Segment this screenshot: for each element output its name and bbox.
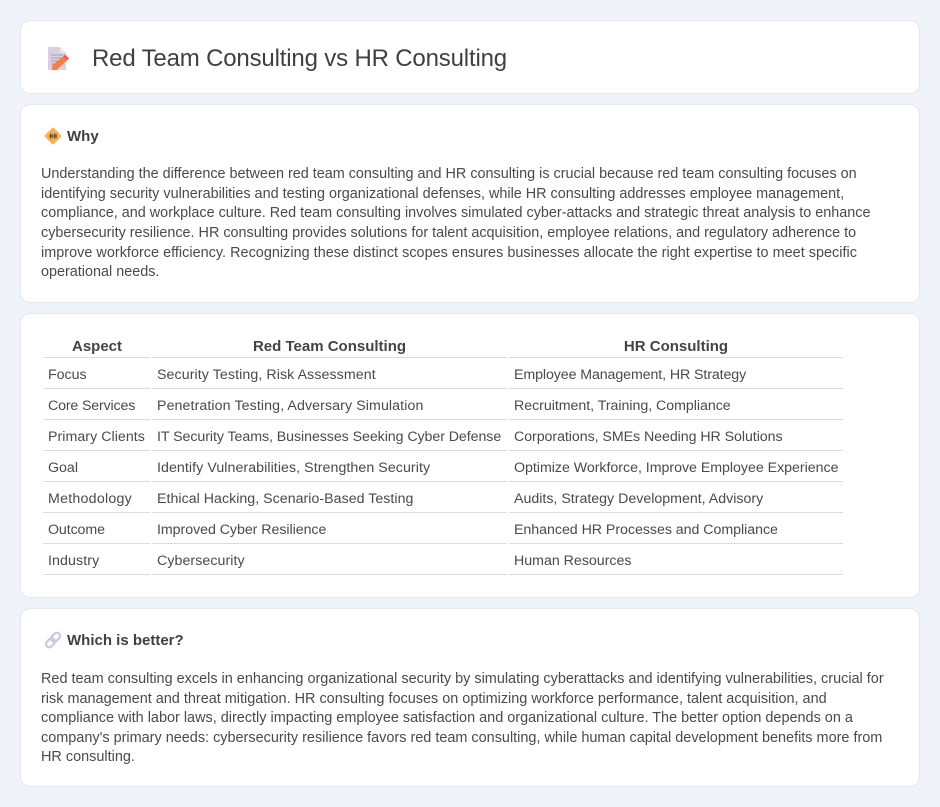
text block: why explanation: compliance, and workplace culture. Red team consulting involves simulated cyber-attacks and strategic threat analysis to enhance [41,205,870,221]
text block: why explanation: identifying security vulnerabilities and testing organizational defenses, while HR consulting addresses employee management, [41,186,844,202]
row: focus [48,367,746,383]
row: goal: Optimize Workforce, Improve Employee Experience [514,460,838,476]
panel: title header [20,20,920,94]
title: Red Team Consulting vs HR Consulting [92,45,507,72]
icon: warning diamond [44,128,62,144]
row: primary clients: Corporations, SMEs Needing HR Solutions [514,429,783,445]
table header row: HR Consulting [624,338,728,355]
row: goal: Goal [48,460,78,476]
table header row: Red Team Consulting [253,338,406,355]
text block: verdict: Red team consulting excels in enhancing organizational security by simulating cyberattacks and identifying vulnerabilities, crucial for [41,671,884,687]
row: goal [48,460,838,476]
row: industry: Human Resources [514,553,632,569]
row: primary clients: IT Security Teams, Businesses Seeking Cyber Defense [157,429,501,445]
row: focus: Employee Management, HR Strategy [514,367,746,383]
row: industry: Industry [48,553,99,569]
row: core services [48,398,731,414]
row: methodology: Audits, Strategy Development, Advisory [514,491,763,507]
row: core services: Core Services [48,398,135,414]
row: methodology [48,491,764,507]
row: methodology: Ethical Hacking, Scenario-Based Testing [157,491,413,507]
text block: verdict: HR consulting. [41,749,135,765]
row: industry: Cybersecurity [157,553,245,569]
row: outcome: Enhanced HR Processes and Compliance [514,522,778,538]
panel: why [20,104,920,303]
text block: why explanation [41,166,870,280]
row: outcome: Improved Cyber Resilience [157,522,326,538]
row: primary clients: Primary Clients [48,429,145,445]
text block: why explanation: improve workforce efficiency. Recognizing these distinct scopes ensures businesses allocate the right expertise to meet specific [41,245,857,261]
text block: verdict: risk management and threat mitigation. HR consulting focuses on optimizing workforce performance, talent acquisition, and [41,691,827,707]
row: methodology: Methodology [48,491,132,507]
table header row: Aspect [72,338,122,355]
row: outcome: Outcome [48,522,105,538]
text block: why explanation: cybersecurity resilience. HR consulting provides solutions for talent acquisition, employee relations, and regulatory adherence to [41,225,856,241]
icon: chain link [45,632,62,648]
row: core services: Penetration Testing, Adversary Simulation [157,398,423,414]
row: industry [48,553,632,569]
row: core services: Recruitment, Training, Compliance [514,398,731,414]
panel: comparison table [20,313,920,598]
row: focus: Security Testing, Risk Assessment [157,367,376,383]
row: primary clients [48,429,783,445]
text block: verdict [41,671,884,765]
heading: which is better: Which is better? [67,632,184,649]
row: outcome [48,522,778,538]
panel: which is better [20,608,920,787]
text block: why explanation: operational needs. [41,264,159,280]
text block: verdict: company's primary needs: cybersecurity resilience favors red team consulting, while human capital development benefits more from [41,730,882,746]
heading: why: Why [67,128,99,145]
text block: verdict: compliance with labor laws, directly impacting employee satisfaction and organizational culture. The better option depends on a [41,710,853,726]
table header row [72,338,728,355]
text block: why explanation: Understanding the difference between red team consulting and HR consulting is crucial because red team consulting focuses on [41,166,857,182]
row: goal: Identify Vulnerabilities, Strengthen Security [157,460,430,476]
row: focus: Focus [48,367,87,383]
icon: memo with pencil [48,47,69,70]
